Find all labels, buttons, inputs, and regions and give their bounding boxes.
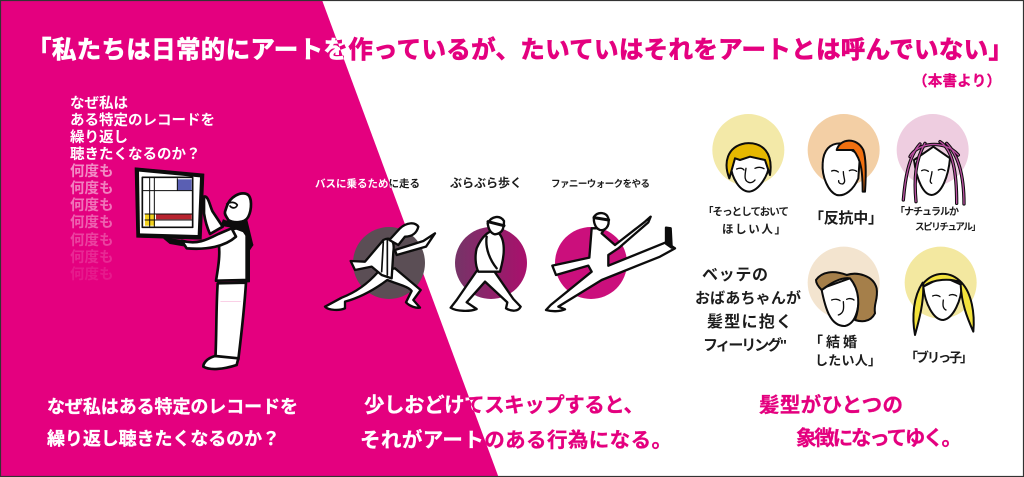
title quote: 「私たちは日常的にアートを作っているが、たいていはそれをアートとは呼んでいない」 — [27, 35, 1013, 64]
panel: repeated question text: 何度も — [70, 213, 114, 231]
caption: middle: それがアートのある行為になる。 — [360, 428, 672, 452]
source note: （本書より） — [913, 72, 1001, 90]
icon: strolling figure — [451, 217, 521, 311]
panel: repeated question text: ある特定のレコードを — [70, 112, 215, 129]
label: funny walk: ファニーウォークをやる — [551, 179, 650, 190]
face: leave me alone — [712, 114, 784, 192]
face: rebellious — [808, 114, 880, 195]
caption: right — [759, 393, 962, 450]
panel: repeated question text: 何度も — [70, 265, 114, 283]
panel: repeated question text: 何度も — [70, 248, 114, 266]
caption: right: 象徴になってゆく。 — [796, 426, 962, 450]
face: natural or spiritual — [897, 114, 969, 204]
face captions: ベッテの — [702, 267, 768, 284]
face captions: おばあちゃんが — [695, 289, 801, 307]
face captions: ほしい人」 — [722, 223, 786, 236]
label: running for a bus: バスに乗るために走る — [315, 177, 420, 190]
circle: dark gray behind runner — [353, 227, 425, 299]
icon: funny-walking figure — [546, 213, 675, 311]
caption: left: なぜ私はある特定のレコードを — [47, 397, 298, 417]
face captions: 「ブリっ子」 — [905, 350, 973, 365]
caption: middle — [360, 394, 672, 452]
face captions — [695, 205, 981, 368]
caption: left — [47, 397, 298, 449]
face captions: フィーリング" — [703, 336, 787, 354]
icon: man holding painting — [135, 168, 253, 369]
panel: repeated question text: 繰り返し — [70, 129, 128, 146]
face captions: 髪型に抱く — [707, 312, 792, 331]
caption: right: 髪型がひとつの — [759, 393, 903, 417]
label: strolling: ぶらぶら歩く — [450, 175, 522, 190]
face captions: 「そっとしておいて — [703, 205, 789, 218]
panel: repeated question text: なぜ私は — [70, 95, 128, 112]
face captions: 「反抗中」 — [809, 209, 883, 227]
face: wants to marry — [808, 247, 880, 326]
panel: repeated question text: 何度も — [70, 231, 114, 249]
panel: repeated question text: 何度も — [70, 179, 114, 197]
icon: running figure — [325, 223, 435, 310]
panel: repeated question text: 聴きたくなるのか？ — [70, 146, 200, 163]
panel: repeated question text: 何度も — [70, 196, 114, 214]
panel: repeated question text — [70, 95, 215, 283]
circle: magenta behind funny walker — [555, 227, 627, 299]
face captions: 「ナチュラルか — [895, 205, 959, 218]
face captions: したい人」 — [815, 353, 881, 368]
face captions: 「結婚 — [809, 334, 857, 350]
pink diagonal background panel — [0, 0, 498, 477]
caption: left: 繰り返し聴きたくなるのか？ — [47, 429, 280, 449]
circle: purple behind stroller — [455, 227, 527, 299]
face captions: スピリチュアル」 — [915, 222, 981, 233]
panel: hair faces — [712, 114, 977, 335]
face: cutesy girl — [905, 247, 977, 335]
caption: middle: 少しおどけてスキップすると、 — [364, 394, 644, 417]
panel: repeated question text: 何度も — [70, 162, 114, 180]
